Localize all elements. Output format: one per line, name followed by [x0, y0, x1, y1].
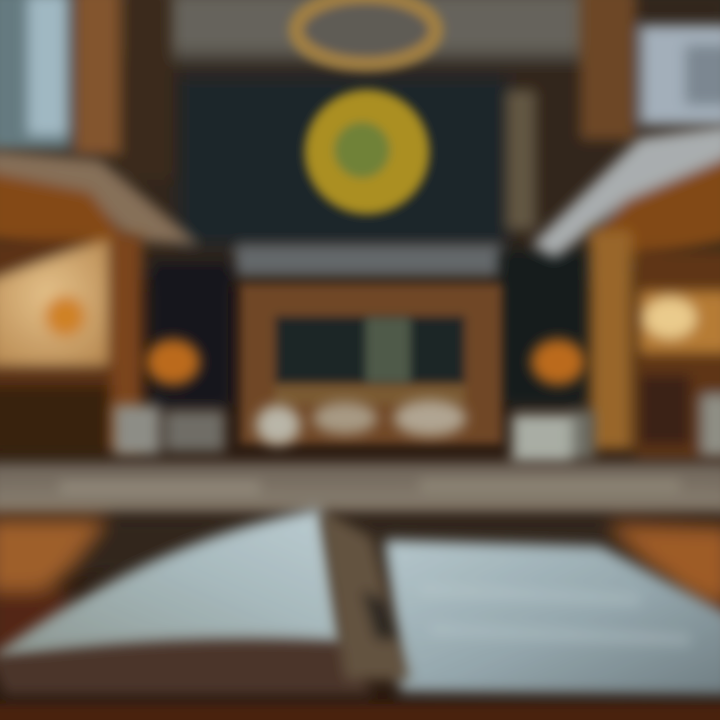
white objects row: [256, 400, 466, 445]
book: right page: [385, 540, 720, 695]
lower dark strip and orange side glows: [0, 516, 720, 660]
horizontal shelf band: [0, 462, 720, 514]
white vases beside cabinet: [114, 405, 594, 464]
right upper window and wood column: [506, 0, 720, 230]
left lamp: [146, 339, 200, 385]
left room glow: [0, 235, 142, 455]
foreground wooden edge: [0, 704, 720, 720]
dark side bays: [150, 250, 590, 407]
book: left page: [0, 508, 345, 660]
gold circular emblem: [305, 90, 429, 214]
book: spine: [320, 508, 410, 680]
right arch: [532, 125, 720, 260]
right lamp: [531, 339, 585, 385]
open book: [0, 508, 720, 695]
right room glow: [590, 230, 720, 460]
ornate gold ring on ceiling: [296, 0, 436, 64]
grey cornice band: [235, 244, 503, 276]
left arch: [0, 150, 200, 262]
left upper window and wood column: [0, 0, 172, 180]
wooden framed cabinet: [240, 284, 502, 444]
background: ceiling and dark wall: [0, 0, 720, 280]
book: left cover edge: [0, 639, 372, 695]
